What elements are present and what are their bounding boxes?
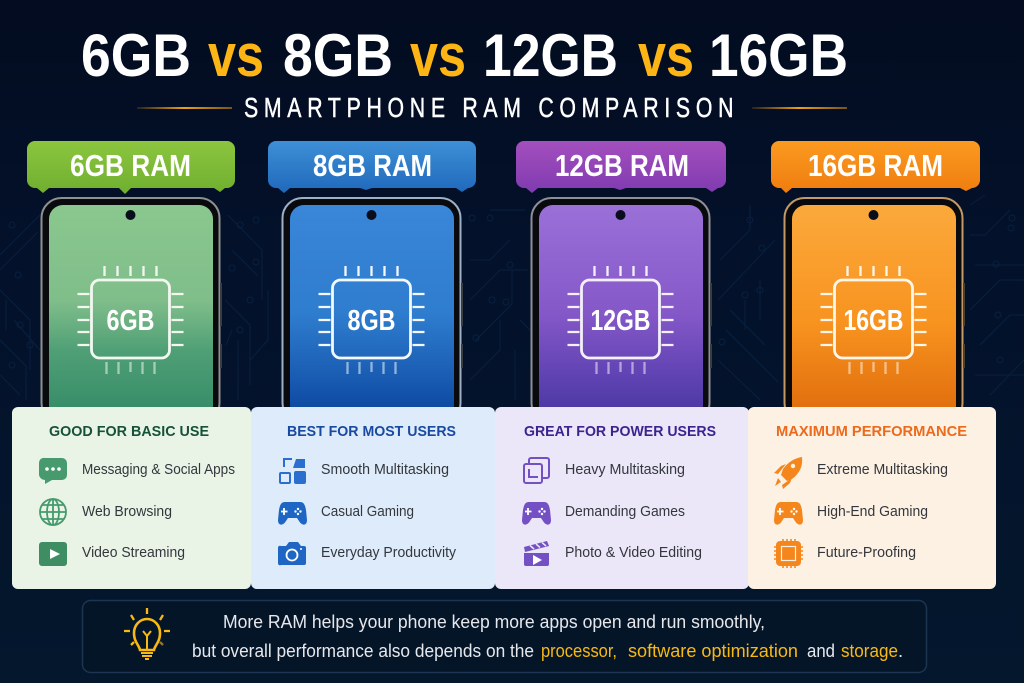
badge: 6GB RAM: 6GB RAM [70, 148, 191, 183]
text line 2: software optimization [628, 640, 798, 661]
badge: 8GB RAM [268, 141, 476, 193]
badge: 12GB RAM [516, 141, 726, 193]
icon: gamepad orange [774, 502, 803, 525]
chip: 12GB: 12GB [590, 305, 650, 337]
badge: 6GB RAM [27, 141, 235, 194]
title: vs [410, 22, 466, 89]
item: messaging: Messaging & Social Apps [82, 462, 235, 478]
panel: 12GB uses [495, 407, 749, 589]
icon: video play [39, 542, 67, 566]
chip: 16GB: 16GB [844, 305, 904, 337]
item: high-end gaming: High-End Gaming [817, 504, 928, 520]
chip: 12GB [568, 266, 674, 374]
chip: 8GB: 8GB [348, 305, 396, 337]
phone: 8GB [282, 198, 463, 423]
title: 6GB [81, 22, 191, 89]
icon: message bubble [39, 458, 67, 484]
badge: 16GB RAM: 16GB RAM [808, 148, 943, 183]
title [81, 22, 848, 89]
item: heavy multitasking: Heavy Multitasking [565, 462, 685, 478]
callout: footer note [82, 600, 926, 672]
text line 2: but overall performance also depends on the [192, 640, 534, 661]
item: extreme multitasking: Extreme Multitasking [817, 462, 948, 478]
chip: 6GB: 6GB [106, 305, 154, 337]
phone: 6GB [42, 198, 222, 423]
item: smooth multitasking: Smooth Multitasking [321, 462, 449, 478]
item: demanding games: Demanding Games [565, 504, 685, 520]
item: photo video editing: Photo & Video Editing [565, 545, 702, 561]
badge: 8GB RAM: 8GB RAM [313, 148, 432, 183]
panel: 16GB uses [748, 407, 996, 589]
chip: 16GB [820, 266, 926, 374]
icon: processor [774, 539, 803, 568]
icon: overlapping windows [524, 458, 549, 483]
icon: gamepad purple [522, 502, 551, 525]
text line 2: storage [841, 640, 898, 661]
phone: 12GB [532, 198, 712, 423]
heading: great for power users: GREAT FOR POWER USERS [524, 423, 716, 440]
icon: camera [278, 542, 306, 565]
icon: multitasking [280, 459, 305, 483]
title: 12GB [483, 22, 618, 89]
title: 8GB [283, 22, 393, 89]
heading: best for most users: BEST FOR MOST USERS [287, 423, 456, 440]
item: casual gaming: Casual Gaming [321, 504, 414, 520]
phone: 16GB [784, 198, 965, 423]
panel: 6GB uses [12, 407, 251, 589]
heading: good for basic use: GOOD FOR BASIC USE [49, 423, 209, 440]
item: everyday productivity: Everyday Productivity [321, 545, 457, 561]
text line 2: . [898, 640, 903, 661]
icon: light bulb [124, 608, 170, 659]
title: 16GB [709, 22, 848, 89]
item: web browsing: Web Browsing [82, 504, 172, 520]
badge: 12GB RAM: 12GB RAM [555, 148, 689, 183]
icon: globe [40, 499, 66, 525]
chip: 6GB [78, 266, 184, 374]
heading: maximum performance: MAXIMUM PERFORMANCE [776, 423, 967, 440]
icon: rocket [774, 457, 802, 489]
badge: 16GB RAM [771, 141, 980, 193]
subtitle: SMARTPHONE RAM COMPARISON [244, 92, 733, 124]
text line 2: and [807, 640, 835, 661]
circuit pattern background [0, 195, 1024, 400]
icon: gamepad blue [278, 502, 307, 525]
text line 2 [192, 640, 903, 661]
panel: 8GB uses [251, 407, 495, 589]
title: vs [208, 22, 264, 89]
chip: 8GB [318, 266, 424, 374]
text line 2: processor, [541, 640, 617, 661]
text line 1: More RAM helps your phone keep more apps open and run smoothly, [223, 611, 765, 632]
item: future-proofing: Future-Proofing [817, 545, 916, 561]
title: vs [638, 22, 694, 89]
item: video streaming: Video Streaming [82, 545, 185, 561]
icon: clapperboard [524, 541, 549, 566]
